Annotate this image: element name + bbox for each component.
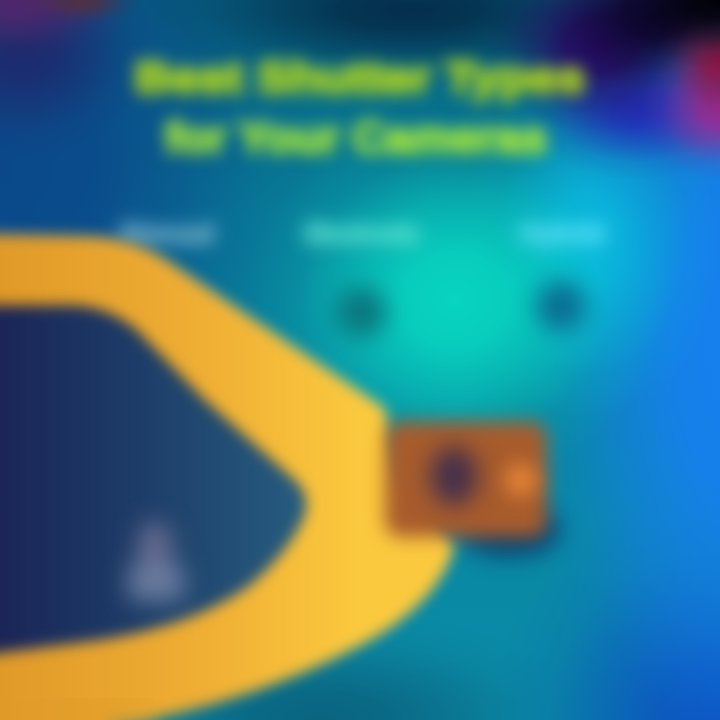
inner dark panel bbox=[0, 305, 306, 658]
title: Best Shutter Types bbox=[135, 53, 585, 102]
column labels: Electronic bbox=[304, 218, 420, 248]
icon: person silhouette bbox=[128, 521, 184, 601]
column labels: Manual bbox=[120, 218, 214, 248]
icon: middle column dot bbox=[336, 287, 386, 337]
title: for Your Cameras bbox=[165, 113, 547, 162]
camera body shadow bbox=[460, 504, 560, 556]
camera body bbox=[385, 421, 547, 537]
icon: right column dot bbox=[536, 281, 586, 331]
column labels bbox=[120, 218, 604, 248]
camera strap band bbox=[0, 233, 455, 720]
icon: lens bbox=[430, 446, 478, 506]
icon: flash dot bbox=[504, 463, 538, 497]
title bbox=[135, 53, 585, 162]
column labels: Hybrid bbox=[520, 218, 604, 248]
